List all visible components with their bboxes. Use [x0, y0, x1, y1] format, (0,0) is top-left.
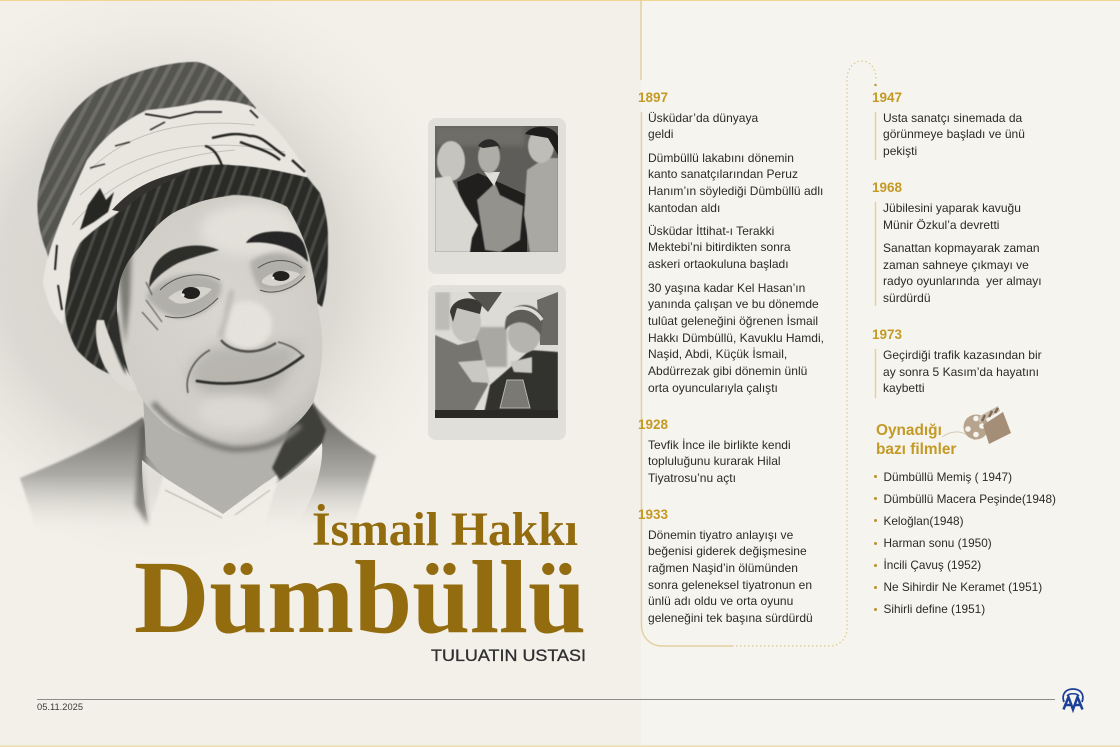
year 1933: 1933: [638, 507, 668, 522]
photo: two actors: [435, 292, 558, 418]
right eyebrow: [246, 231, 308, 262]
photo frame: bottom: [428, 285, 566, 440]
year 1973: 1973: [872, 327, 902, 342]
year 1897: 1897: [638, 90, 668, 105]
text: orta oyunu: ünlü adı oldu ve orta oyunu: [648, 594, 793, 608]
text: death: Geçirdiği trafik kazasından bir: [883, 348, 1042, 362]
text: cinema: Usta sanatçı sinemada da: [883, 110, 1022, 124]
text: later years: zaman sahneye çıkmayı ve: [883, 258, 1029, 272]
photo frame: top: [428, 118, 566, 274]
text: apprenticeship: [648, 280, 824, 395]
film 5: İncili Çavuş (1952): [884, 558, 981, 572]
films heading: bazı filmler: [876, 441, 956, 458]
year 1968: 1968: [872, 180, 902, 195]
text: birth: Üsküdar’da dünyaya: [648, 110, 758, 124]
films heading: [876, 422, 956, 458]
text: death: [883, 348, 1042, 395]
film 1: Dümbüllü Memiş ( 1947): [884, 470, 1012, 484]
text: jubilee: Münir Özkul’a devretti: [883, 218, 999, 232]
entry: 1928: [638, 417, 791, 485]
text: nickname: kantodan aldı: [648, 201, 720, 215]
text: nickname: [648, 150, 823, 215]
film list: [874, 470, 1056, 616]
text: school: [648, 224, 791, 271]
nose: [220, 290, 276, 351]
text: apprenticeship: 30 yaşına kadar Kel Hasan’ın: [648, 280, 805, 294]
film 3: Keloğlan(1948): [884, 514, 964, 528]
film reel and clapper icon: [942, 406, 1011, 444]
text: jubilee: [883, 201, 1021, 232]
text: Hilal Tiyatrosu: Tiyatrosu’nu açtı: [648, 471, 736, 485]
text: death: ay sonra 5 Kasım’da hayatını: [883, 365, 1039, 379]
entry: 1897: [638, 90, 824, 395]
jaw stubble: [153, 403, 300, 449]
text: apprenticeship: Hakkı Dümbüllü, Kavuklu Hamdi,: [648, 331, 824, 345]
jacket: [20, 402, 376, 540]
text: school: Mektebi’ni bitirdikten sonra: [648, 240, 791, 254]
face: [117, 196, 322, 448]
left eyebrow: [149, 246, 219, 288]
text: orta oyunu: [648, 528, 813, 625]
neck: [143, 395, 314, 514]
title: surname: Dümbüllü: [134, 540, 586, 655]
text: orta oyunu: rağmen Naşid’in ölümünden: [648, 561, 798, 575]
towel wrap: [43, 100, 307, 325]
footer rule: [37, 699, 1055, 700]
film 2: Dümbüllü Macera Peşinde(1948): [884, 492, 1056, 506]
text: school: Üsküdar İttihat-ı Terakki: [648, 224, 774, 238]
text: orta oyunu: sonra geleneksel tiyatronun en: [648, 578, 812, 592]
text: orta oyunu: beğenisi giderek değişmesine: [648, 544, 807, 558]
cap back: [37, 62, 256, 290]
text: later years: Sanattan kopmayarak zaman: [883, 241, 1040, 255]
text: birth: [648, 110, 758, 141]
text: later years: radyo oyunlarında yer almayı: [883, 274, 1042, 288]
text: cinema: [883, 110, 1025, 158]
text: cinema: pekişti: [883, 144, 917, 158]
portrait of Dümbüllü: [20, 60, 376, 560]
text: jubilee: Jübilesini yaparak kavuğu: [883, 201, 1021, 215]
text: death: kaybetti: [883, 381, 925, 395]
timeline line: [641, 0, 877, 646]
left eye: [142, 274, 221, 330]
photo: three men: [435, 126, 558, 252]
text: Hilal Tiyatrosu: [648, 438, 791, 485]
entry: 1973: [872, 327, 1042, 395]
knit band: [64, 164, 328, 377]
text: nickname: Hanım’ın söylediği Dümbüllü adlı: [648, 184, 823, 198]
text: apprenticeship: tulûat geleneğini öğrenen İsmail: [648, 314, 818, 328]
entry: 1947: [872, 90, 1025, 158]
text: Hilal Tiyatrosu: Tevfik İnce ile birlikte kendi: [648, 438, 791, 452]
Anadolu Agency logo: [1063, 689, 1083, 710]
films heading: Oynadığı: [876, 422, 942, 439]
text: nickname: Dümbüllü lakabını dönemin: [648, 150, 794, 164]
text: orta oyunu: Dönemin tiyatro anlayışı ve: [648, 528, 793, 542]
title: first line: İsmail Hakkı: [312, 503, 578, 556]
year 1947: 1947: [872, 90, 902, 105]
text: apprenticeship: Abdürrezak gibi dönemin ünlü: [648, 364, 807, 378]
shirt collar: [142, 443, 322, 560]
text: nickname: kanto sanatçılarından Peruz: [648, 167, 798, 181]
year 1928: 1928: [638, 417, 668, 432]
right eye: [250, 253, 307, 292]
smile: [187, 342, 303, 393]
text: later years: [883, 241, 1042, 305]
text: school: askeri ortaokuluna başladı: [648, 257, 789, 271]
text: birth: geldi: [648, 127, 673, 141]
ear: [96, 312, 137, 391]
text: apprenticeship: yanında çalışan ve bu dönemde: [648, 297, 819, 311]
date: 05.11.2025: [37, 702, 83, 712]
film 7: Sihirli define (1951): [884, 602, 985, 616]
text: apprenticeship: orta oyuncularıyla çalıştı: [648, 381, 778, 395]
text: orta oyunu: geleneğini tek başına sürdürdü: [648, 611, 813, 625]
text: Hilal Tiyatrosu: topluluğunu kurarak Hilal: [648, 454, 781, 468]
film 6: Ne Sihirdir Ne Keramet (1951): [884, 580, 1042, 594]
entry: 1968: [872, 180, 1042, 305]
entry: 1933: [638, 507, 813, 625]
subtitle: TULUATIN USTASI: [431, 647, 586, 665]
film 4: Harman sonu (1950): [884, 536, 992, 550]
text: apprenticeship: Naşid, Abdi, Küçük İsmail,: [648, 347, 787, 361]
neck shadow: [272, 402, 326, 480]
text: later years: sürdürdü: [883, 291, 931, 305]
text: cinema: görünmeye başladı ve ünü: [883, 127, 1025, 141]
